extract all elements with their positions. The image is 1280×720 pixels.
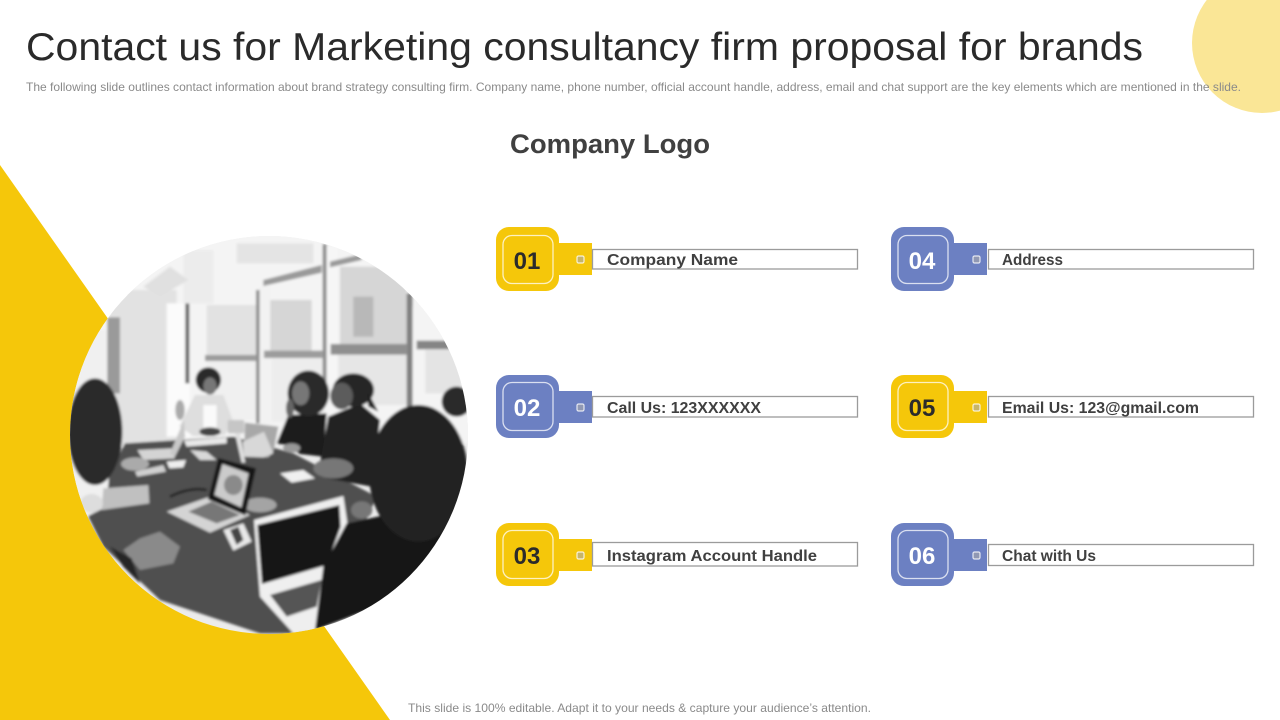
contact item 02: phone: 02 <box>514 395 540 422</box>
contact item 01: company name: 01 <box>514 248 540 275</box>
contact item 06: chat: Chat with Us <box>1002 548 1096 565</box>
tab <box>556 243 592 275</box>
contact item 06: chat <box>891 523 1254 586</box>
number badge <box>496 227 559 291</box>
contact item 05: email: 05 <box>909 395 935 422</box>
title: Contact us for Marketing consultancy firm proposal for brands <box>26 26 1143 69</box>
contact item 05: email: Email Us: 123@gmail.com <box>1002 400 1199 417</box>
contact item 02: phone: Call Us: 123XXXXXX <box>607 400 761 417</box>
decorative corner circle <box>1192 0 1280 113</box>
contact item 02: phone <box>496 375 858 438</box>
contact item 01: company name <box>496 227 858 291</box>
contact item 04: address <box>891 227 1254 291</box>
contact item 05: email <box>891 375 1254 438</box>
photo: team meeting around a table <box>60 230 480 640</box>
subtitle description: The following slide outlines contact information about brand strategy consulting firm. Company name, phone number, official account handle, address, email and chat support are the key elements which are mentioned in the slide. <box>26 80 1241 94</box>
contact item 06: chat: 06 <box>909 543 935 570</box>
contact item 03: instagram: Instagram Account Handle <box>607 548 817 565</box>
contact item 01: company name: Company Name <box>607 252 738 269</box>
contact item 03: instagram: 03 <box>514 543 540 570</box>
contact item 04: address: Address <box>1002 252 1063 269</box>
contact item 04: address: 04 <box>909 248 936 275</box>
yellow triangle background <box>0 165 390 720</box>
footer note: This slide is 100% editable. Adapt it to your needs & capture your audience’s attention. <box>408 701 871 715</box>
label box <box>592 250 858 269</box>
contact item 03: instagram <box>496 523 858 586</box>
company logo heading: Company Logo <box>510 129 710 159</box>
